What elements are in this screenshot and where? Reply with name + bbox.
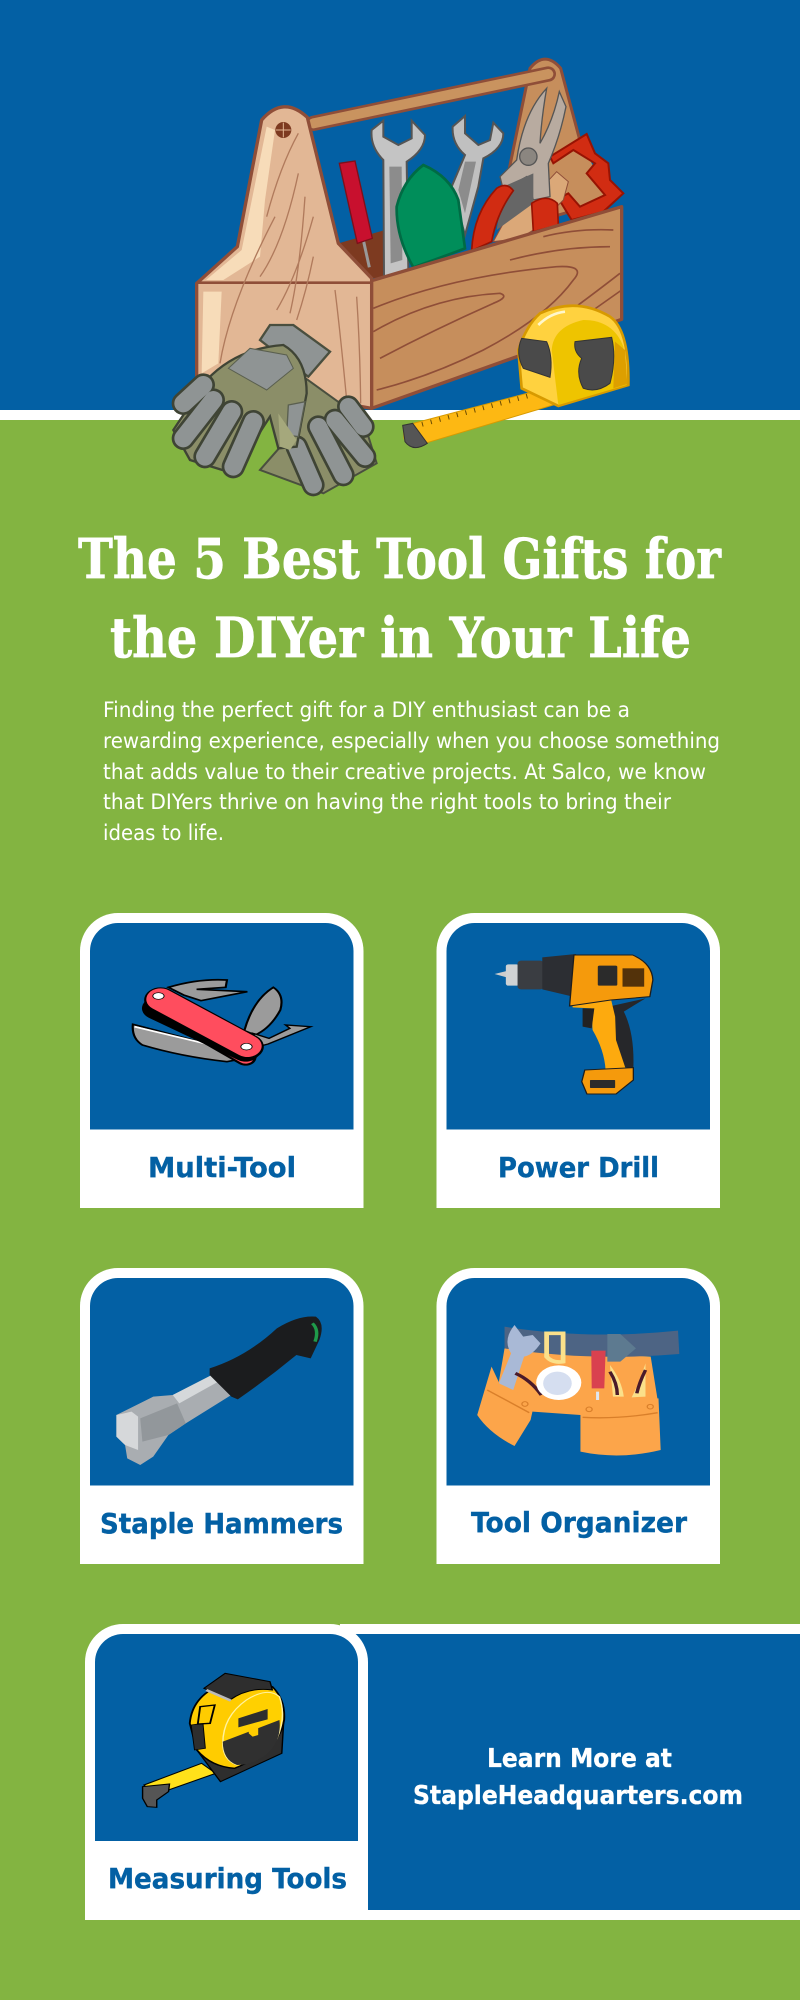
title xyxy=(78,526,722,670)
icon: wooden piece in box xyxy=(493,172,568,242)
icon: pocket multi-tool xyxy=(133,980,311,1062)
icon: toolbox handle xyxy=(313,74,548,123)
icon: red screwdriver xyxy=(339,161,372,267)
title: the DIYer in Your Life xyxy=(110,605,691,670)
intro paragraph xyxy=(103,698,720,846)
icon: compact tape measure xyxy=(143,1673,284,1807)
illustration: toolbox with tools, gloves and tape measure xyxy=(173,59,628,493)
panel: Staple Hammers card xyxy=(80,1268,364,1564)
panel: Multi-Tool card xyxy=(80,913,364,1208)
icon: tin snips xyxy=(472,88,566,251)
icon: toolbox rear end piece xyxy=(508,59,587,230)
icon: hammer stapler xyxy=(116,1316,322,1465)
icon: left wrench xyxy=(371,121,425,277)
intro paragraph: rewarding experience, especially when you choose something xyxy=(103,729,720,754)
icon: green scoop xyxy=(397,165,465,267)
icon: right wrench xyxy=(452,116,503,235)
icon: red saw handle xyxy=(550,134,623,220)
icon: work gloves xyxy=(173,325,377,493)
callout: Learn More banner: Learn More at xyxy=(487,1744,672,1774)
panel: Tool Organizer card xyxy=(436,1268,720,1564)
icon: toolbox front panel xyxy=(372,207,622,408)
header: blue band xyxy=(0,0,800,410)
label: Staple Hammers: Staple Hammers xyxy=(100,1507,343,1540)
icon: toolbox interior xyxy=(338,230,390,278)
icon: toolbox left end xyxy=(197,107,372,408)
label: Multi-Tool: Multi-Tool xyxy=(148,1151,296,1184)
intro paragraph: that DIYers thrive on having the right tools to bring their xyxy=(103,790,671,815)
icon: yellow tape measure xyxy=(403,306,628,448)
label: Power Drill: Power Drill xyxy=(498,1151,659,1184)
panel: Measuring Tools card xyxy=(85,1624,368,1920)
intro paragraph: ideas to life. xyxy=(103,821,224,846)
label: Measuring Tools: Measuring Tools xyxy=(108,1862,347,1895)
icon: tan saw blade xyxy=(550,147,607,215)
intro paragraph: that adds value to their creative projects. At Salco, we know xyxy=(103,760,706,785)
panel: Power Drill card xyxy=(436,913,720,1208)
icon: cordless drill xyxy=(495,954,653,1094)
intro paragraph: Finding the perfect gift for a DIY enthusiast can be a xyxy=(103,698,630,723)
label: Tool Organizer: Tool Organizer xyxy=(471,1506,687,1539)
callout: Learn More banner: StapleHeadquarters.com xyxy=(413,1781,743,1811)
icon: tool belt xyxy=(477,1325,679,1455)
callout: Learn More banner xyxy=(340,1624,800,1920)
